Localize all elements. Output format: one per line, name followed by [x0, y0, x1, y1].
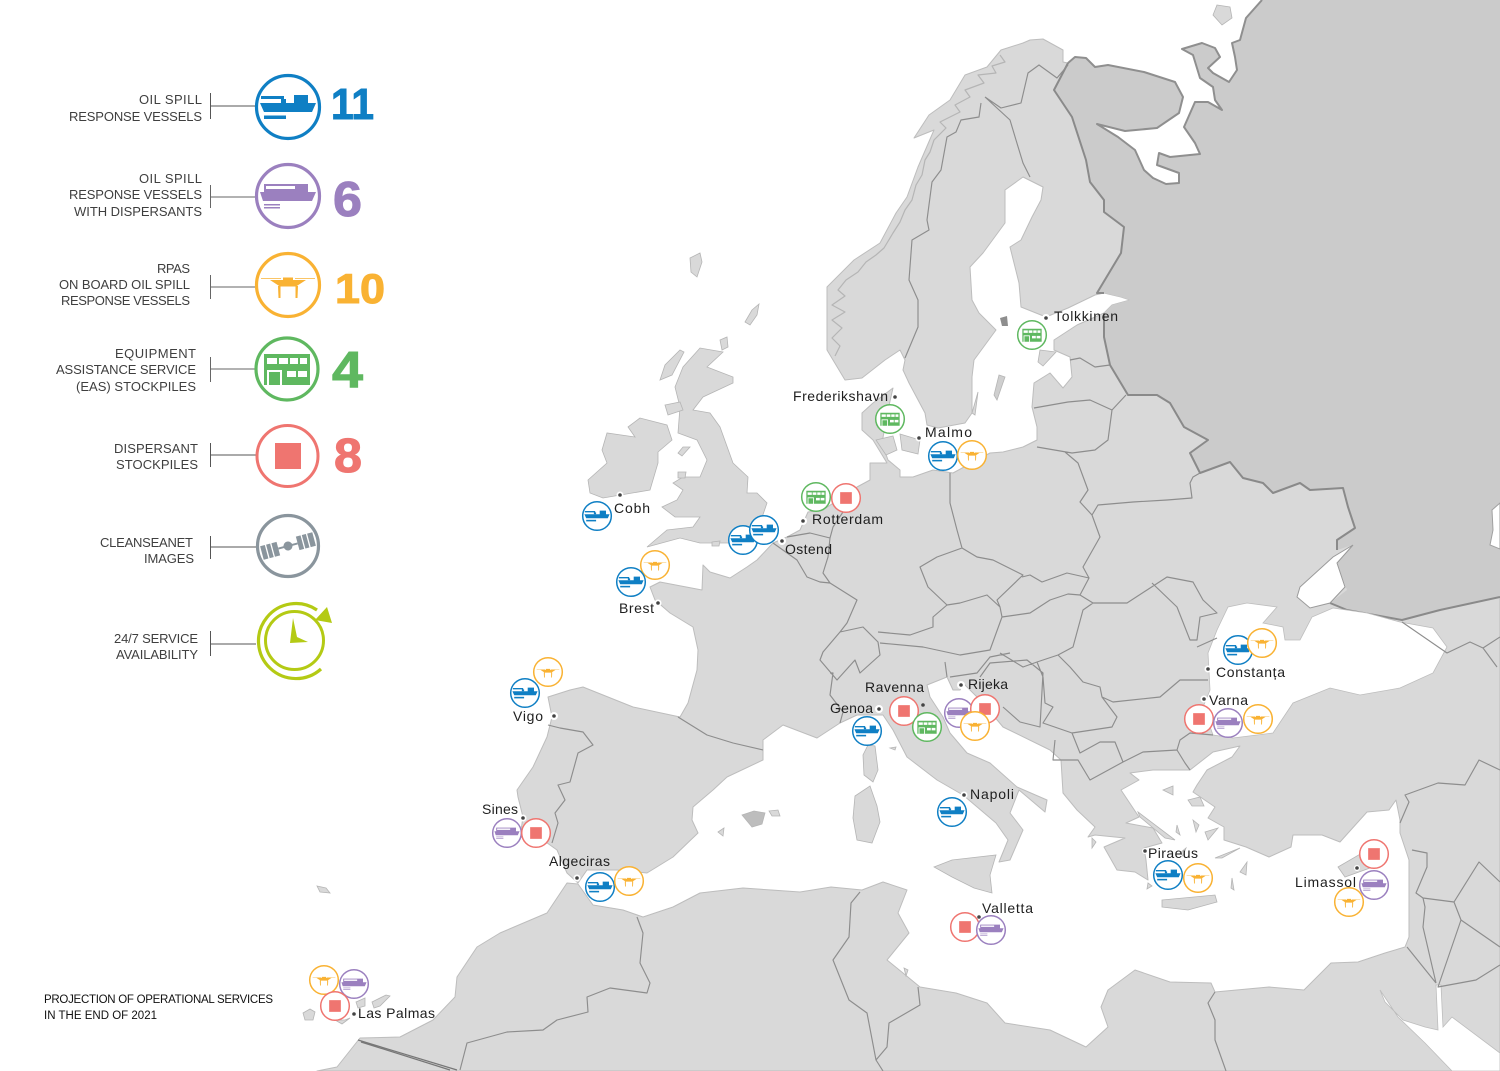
location: Genoa: Genoa [830, 700, 873, 716]
location: Cobh: Cobh [614, 500, 650, 516]
location: Algeciras [549, 853, 643, 901]
legend row: oil spill response vessels [69, 76, 374, 138]
location: Valletta [951, 900, 1033, 944]
location: Malmo: Malmo [925, 424, 972, 440]
island: Ireland [588, 418, 672, 498]
legend row: oil spill response vessels: 11 [331, 80, 374, 129]
location: Malmo [916, 424, 986, 470]
legend row: oil spill response vessels with dispersants: WITH DISPERSANTS [74, 204, 202, 219]
map: land masses of Europe, North Africa and the Near East [303, 0, 1500, 1071]
legend row: oil spill response vessels: RESPONSE VESSELS [69, 109, 202, 124]
location: Napoli: Napoli [970, 786, 1014, 802]
location: Limassol: Limassol [1295, 874, 1356, 890]
location: Valletta: Valletta [982, 900, 1033, 916]
legend row: dispersant stockpiles [114, 426, 362, 486]
location: Tolkkinen: Tolkkinen [1054, 308, 1118, 324]
legend row: oil spill response vessels with dispersants: 6 [333, 173, 362, 227]
location: Brest: Brest [619, 600, 654, 616]
legend row: 24/7 service availability: 24/7 SERVICE [114, 631, 198, 646]
sea: Caspian Sea [1490, 503, 1500, 549]
legend row: dispersant stockpiles: DISPERSANT [114, 441, 198, 456]
location: Brest [617, 551, 669, 616]
location: Sines: Sines [482, 801, 518, 817]
location: Tolkkinen [1018, 308, 1118, 349]
sea: Red Sea and gulfs [1380, 985, 1500, 1071]
location: Ostend: Ostend [785, 541, 832, 557]
location: Vigo: Vigo [513, 708, 543, 724]
legend row: dispersant stockpiles: 8 [334, 430, 362, 483]
location: Ravenna [865, 679, 941, 741]
caption: projection of operational services [44, 994, 273, 1022]
legend row: RPAS on board oil spill response vessels: ON BOARD OIL SPILL [59, 277, 190, 292]
island: Crete [1162, 895, 1217, 910]
location: Piraeus [1142, 845, 1212, 892]
legend row: RPAS on board oil spill response vessels: RPAS [157, 261, 190, 276]
location: Genoa [830, 700, 883, 745]
location: Algeciras: Algeciras [549, 853, 610, 869]
legend row: dispersant stockpiles: STOCKPILES [116, 457, 198, 472]
island: Cyprus [1338, 853, 1370, 877]
legend row: oil spill response vessels with dispersants: OIL SPILL [139, 171, 202, 186]
legend row: CleanSeaNet images [100, 516, 318, 576]
legend row: equipment assistance service stockpiles: EQUIPMENT [115, 346, 196, 361]
country borders [460, 65, 1500, 1071]
legend row: CleanSeaNet images: CLEANSEANET [100, 535, 193, 550]
location: Piraeus: Piraeus [1148, 845, 1198, 861]
location: Las Palmas [310, 966, 435, 1021]
legend row: oil spill response vessels: OIL SPILL [139, 92, 202, 107]
legend row: RPAS on board oil spill response vessels [59, 254, 385, 316]
sea: Sea of Azov [1297, 545, 1353, 608]
location: Constanța [1204, 629, 1285, 680]
location: Las Palmas: Las Palmas [358, 1005, 435, 1021]
location: Rotterdam [799, 483, 883, 527]
legend row: 24/7 service availability: AVAILABILITY [116, 647, 198, 662]
legend row: equipment assistance service stockpiles: ASSISTANCE SERVICE [56, 362, 196, 377]
location: Rijeka [945, 676, 1008, 740]
sea: Black Sea [1203, 603, 1447, 738]
legend row: equipment assistance service stockpiles: (EAS) STOCKPILES [76, 379, 196, 394]
location: Ravenna: Ravenna [865, 679, 924, 695]
location: Cobh [583, 492, 650, 530]
legend row: RPAS on board oil spill response vessels: RESPONSE VESSELS [61, 293, 190, 308]
legend row: oil spill response vessels with dispersants: RESPONSE VESSELS [69, 187, 202, 202]
caption: projection of operational services: PROJECTION OF OPERATIONAL SERVICES [44, 994, 273, 1006]
location: Rijeka: Rijeka [968, 676, 1008, 692]
location: Limassol [1295, 840, 1388, 916]
island: Sicily [934, 855, 996, 893]
island: Great Britain [647, 348, 767, 547]
location: Varna [1185, 692, 1272, 737]
location: Frederikshavn: Frederikshavn [793, 388, 888, 404]
legend row: equipment assistance service stockpiles [56, 338, 364, 400]
location: Ostend [729, 516, 832, 557]
islands [303, 5, 1370, 1024]
legend row: RPAS on board oil spill response vessels: 10 [335, 265, 385, 312]
location: Napoli [938, 786, 1014, 826]
location: Vigo [511, 658, 562, 724]
location: Rotterdam: Rotterdam [812, 511, 883, 527]
legend row: oil spill response vessels with dispersants [69, 164, 362, 228]
caption: projection of operational services: IN THE END OF 2021 [44, 1010, 157, 1022]
legend row: 24/7 service availability [114, 604, 332, 679]
legend row: CleanSeaNet images: IMAGES [144, 551, 194, 566]
location: Sines [482, 801, 550, 847]
location: Frederikshavn [793, 388, 904, 433]
location: Constanța: Constanța [1216, 664, 1285, 680]
location: Varna: Varna [1209, 692, 1248, 708]
legend row: equipment assistance service stockpiles: 4 [332, 341, 364, 398]
